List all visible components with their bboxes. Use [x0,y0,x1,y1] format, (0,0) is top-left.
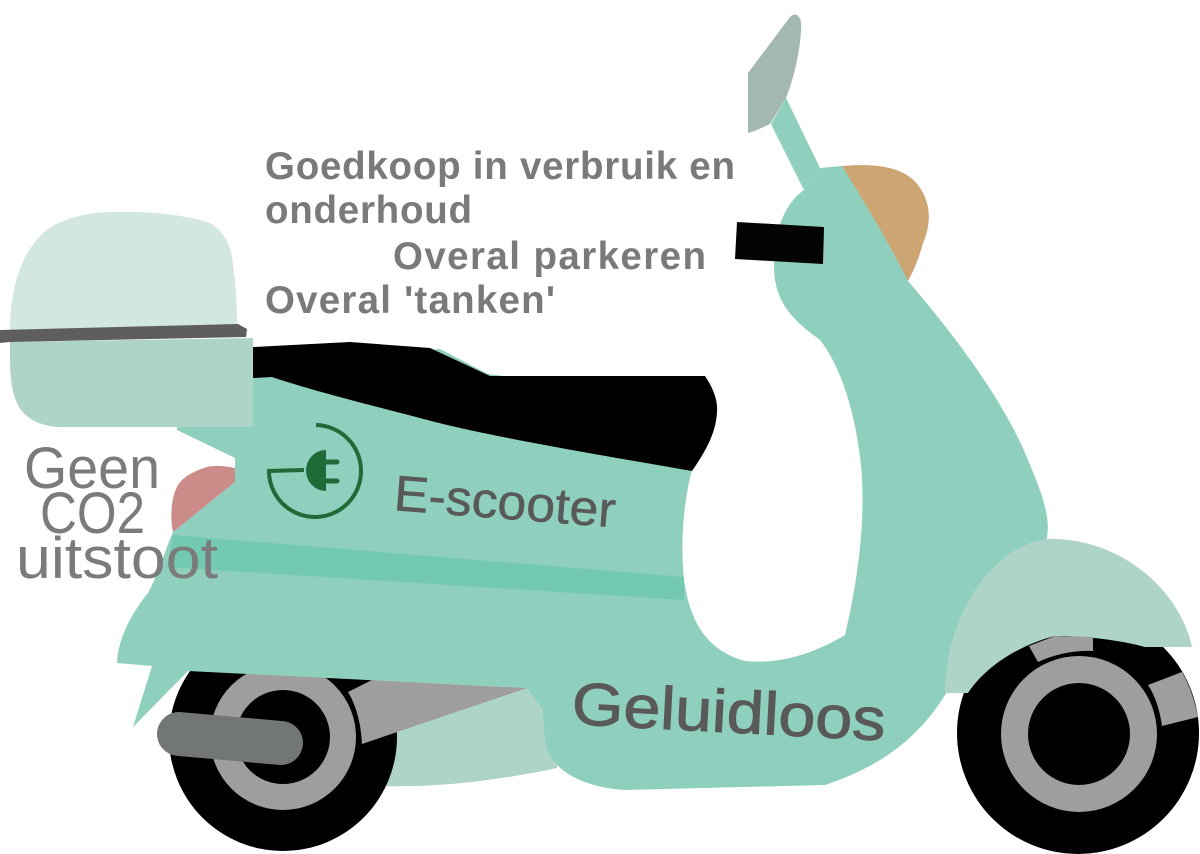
rear mudguard [340,680,560,786]
swingarm [348,680,527,744]
icon: electric plug [269,425,361,517]
tail light [171,466,235,532]
mirror stem [771,98,820,190]
top box lid [10,212,237,332]
mirror [748,14,801,133]
text: geen CO2 uitstoot [16,436,218,591]
handlebar grip [735,222,824,264]
front fork bracket top [1029,636,1093,662]
text: geen CO2 uitstoot: CO2 [40,481,145,546]
body stripe [167,535,684,600]
text: geen CO2 uitstoot: uitstoot [16,526,218,591]
top box base [10,338,253,427]
text: benefits list: Overal parkeren [393,235,706,278]
text: benefits list: onderhoud [265,189,472,232]
front fork bracket right [1148,672,1198,726]
text: geen CO2 uitstoot: Geen [24,436,160,501]
text: benefits list: Overal 'tanken' [265,279,555,322]
text: Geluidloos: Geluidloos [570,670,887,753]
top box strap [0,324,247,343]
scooter body [117,166,1048,790]
text: E-scooter: E-scooter [392,465,618,538]
text: benefits list [265,145,735,322]
exhaust [179,734,281,743]
rear wheel [169,623,397,851]
front wheel [957,612,1199,854]
text: benefits list: Goedkoop in verbruik en [265,145,735,188]
front fender [945,539,1192,693]
headlight [842,165,929,281]
seat [253,342,717,471]
